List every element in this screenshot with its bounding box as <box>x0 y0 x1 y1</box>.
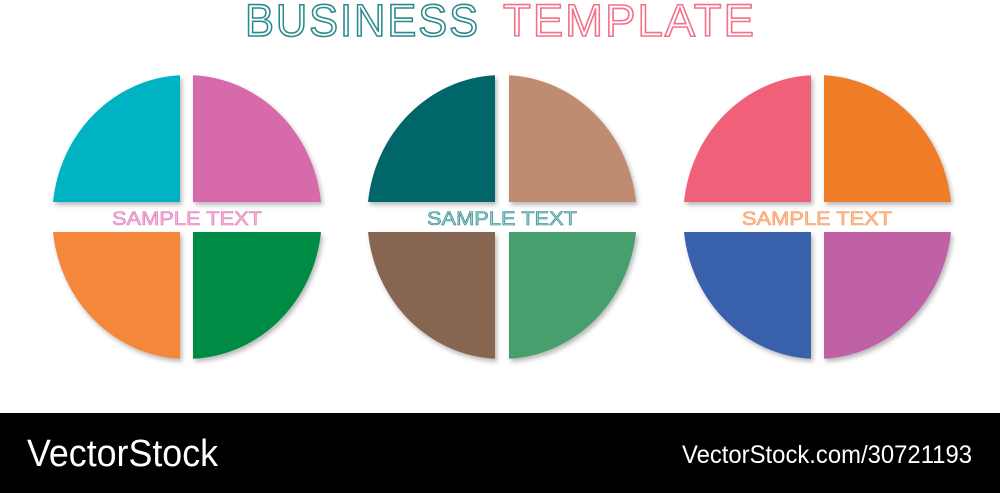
chart 2 <box>368 75 636 359</box>
chart 1 <box>53 75 321 359</box>
title <box>245 0 756 46</box>
footer band <box>0 413 1000 493</box>
footer band: VectorStock <box>27 433 219 475</box>
label 2: SAMPLE TEXT <box>427 209 577 230</box>
chart 3 <box>684 75 951 359</box>
label 3: SAMPLE TEXT <box>742 209 892 230</box>
label 1: SAMPLE TEXT <box>112 209 262 230</box>
footer band: VectorStock.com/30721193 <box>682 441 972 469</box>
